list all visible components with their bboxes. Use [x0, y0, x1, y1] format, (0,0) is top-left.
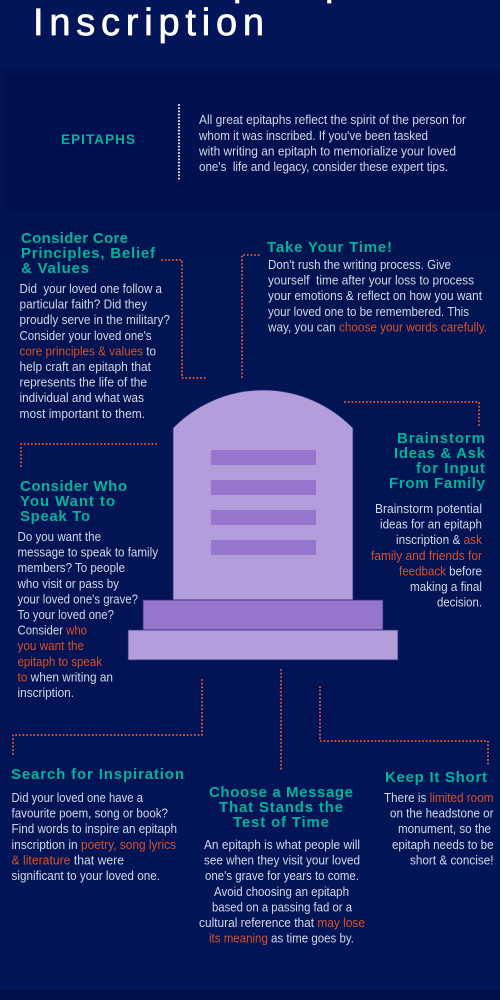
intro text: with writing an epitaph to memorialize your loved	[198, 144, 456, 158]
text: keep it short: epitaph needs to be	[392, 838, 494, 852]
text: search: favourite poem, song or book?	[12, 807, 168, 821]
text: take your time: yourself time after your loss to process	[268, 274, 474, 288]
heading: keep it short: Keep It Short	[385, 769, 487, 786]
text: core principles: help craft an epitaph that	[20, 360, 151, 374]
text: keep it short: monument, so the	[398, 822, 491, 836]
text: consider who: you want the	[18, 639, 84, 653]
text: keep it short: There is limited room	[384, 791, 494, 805]
text: consider who: to when writing an	[18, 670, 113, 684]
text: take your time	[267, 258, 487, 334]
text: choose a message: based on a passing fad or a	[212, 900, 352, 914]
text: search: inscription in poetry, song lyrics	[12, 838, 176, 852]
text: search	[12, 791, 177, 883]
text: search: & literature that were	[12, 853, 124, 867]
connector: keep it short	[320, 687, 488, 764]
text: core principles: represents the life of the	[20, 376, 147, 390]
heading: choose a message: That Stands the	[219, 799, 343, 816]
heading: brainstorm: for Input	[416, 460, 485, 477]
text: brainstorm: ideas for an epitaph	[380, 518, 482, 532]
text: consider who: To your loved one?	[18, 608, 114, 622]
text: core principles: most important to them.	[20, 407, 145, 421]
intro text: whom it was inscribed. If you've been tasked	[198, 129, 428, 143]
text: brainstorm: inscription & ask	[396, 533, 483, 547]
intro text: All great epitaphs reflect the spirit of the person for	[199, 113, 466, 127]
text: search: significant to your loved one.	[12, 869, 160, 883]
text: core principles	[20, 282, 170, 421]
connector: core principles	[162, 260, 205, 378]
panel: choose a message	[199, 670, 365, 946]
heading: epitaphs: EPITAPHS	[61, 132, 135, 147]
connector: take your time	[242, 255, 261, 377]
heading: choose a message	[209, 784, 353, 831]
panel: consider who	[17, 444, 159, 700]
text: core principles: particular faith? Did they	[20, 298, 148, 312]
text: keep it short: short & concise!	[410, 853, 494, 867]
connector: choose a message	[280, 670, 282, 772]
text: core principles: individual and what was	[20, 391, 144, 405]
text: choose a message: see when they visit your loved	[204, 854, 360, 868]
heading: consider who	[20, 478, 127, 525]
heading: take your time: Take Your Time!	[267, 239, 392, 256]
heading: brainstorm: Ideas & Ask	[394, 445, 486, 462]
heading: core principles: Consider Core	[21, 230, 128, 247]
heading: choose a message: Choose a Message	[209, 784, 353, 801]
text: choose a message: Avoid choosing an epitaph	[214, 885, 349, 899]
text: consider who: inscription.	[18, 686, 74, 700]
title	[33, 0, 375, 44]
panel: intro	[3, 71, 500, 213]
heading: consider who: Consider Who	[20, 478, 127, 495]
heading: brainstorm	[389, 430, 486, 492]
divider: dotted vertical	[178, 105, 180, 181]
heading: core principles: & Values	[21, 260, 89, 277]
heading: core principles: Principles, Belief	[21, 245, 156, 262]
text: consider who: members? To people	[18, 561, 125, 575]
text: search: Did your loved one have a	[12, 791, 143, 805]
text: core principles: core principles & values to	[20, 344, 156, 358]
text: take your time: Don't rush the writing process. Give	[268, 258, 451, 272]
panel: search for inspiration	[11, 680, 202, 883]
text: take your time: way, you can choose your words carefully.	[267, 320, 487, 334]
heading: choose a message: Test of Time	[233, 814, 329, 831]
text: consider who: who visit or pass by	[17, 577, 120, 591]
intro text	[198, 113, 466, 174]
panel: keep it short	[320, 687, 494, 867]
connector: brainstorm	[345, 402, 479, 426]
headstone inscription bars	[211, 450, 316, 555]
panel: take your time	[242, 239, 487, 377]
text: brainstorm: family and friends for	[371, 549, 482, 563]
text: choose a message: one's grave for years to come.	[205, 869, 359, 883]
connector: consider who	[21, 444, 156, 468]
headstone upper base	[143, 600, 383, 630]
text: core principles: Did your loved one follow a	[20, 282, 162, 296]
text: consider who: Do you want the	[18, 530, 101, 544]
panel: brainstorm	[345, 402, 486, 610]
panel: core principles	[20, 230, 205, 421]
text: consider who: Consider who	[18, 624, 87, 638]
text: consider who: your loved one's grave?	[18, 592, 138, 606]
intro text: one's life and legacy, consider these expert tips.	[199, 160, 448, 174]
text: brainstorm: feedback before	[399, 564, 482, 578]
text: consider who	[17, 530, 159, 700]
text: search: Find words to inspire an epitaph	[12, 822, 177, 836]
text: brainstorm: making a final	[410, 580, 482, 594]
text: brainstorm	[371, 502, 483, 610]
text: core principles: Consider your loved one's	[20, 329, 152, 343]
text: choose a message: cultural reference that may lose	[199, 916, 365, 930]
text: consider who: epitaph to speak	[18, 655, 103, 669]
heading: brainstorm: From Family	[389, 475, 486, 492]
text: take your time: your loved one to be remembered. This	[268, 305, 469, 319]
text: choose a message: An epitaph is what people will	[204, 838, 360, 852]
text: choose a message: its meaning as time goes by.	[209, 932, 354, 946]
text: choose a message	[199, 838, 365, 946]
heading: brainstorm: Brainstorm	[397, 430, 485, 447]
text: keep it short: on the headstone or	[390, 807, 494, 821]
icon: headstone	[128, 390, 398, 660]
text: keep it short	[384, 791, 494, 867]
text: brainstorm: Brainstorm potential	[375, 502, 482, 516]
text: consider who: message to speak to family	[18, 546, 159, 560]
text: core principles: proudly serve in the military?	[20, 313, 170, 327]
headstone lower base	[128, 630, 398, 660]
heading: consider who: You Want to	[20, 493, 115, 510]
connector: search	[13, 680, 202, 756]
text: take your time: your emotions & reflect on how you want	[268, 289, 482, 303]
heading: consider who: Speak To	[20, 508, 90, 525]
heading: search: Search for Inspiration	[11, 766, 184, 783]
text: brainstorm: decision.	[437, 596, 482, 610]
title: Inscription	[33, 2, 264, 44]
heading: core principles	[21, 230, 156, 277]
